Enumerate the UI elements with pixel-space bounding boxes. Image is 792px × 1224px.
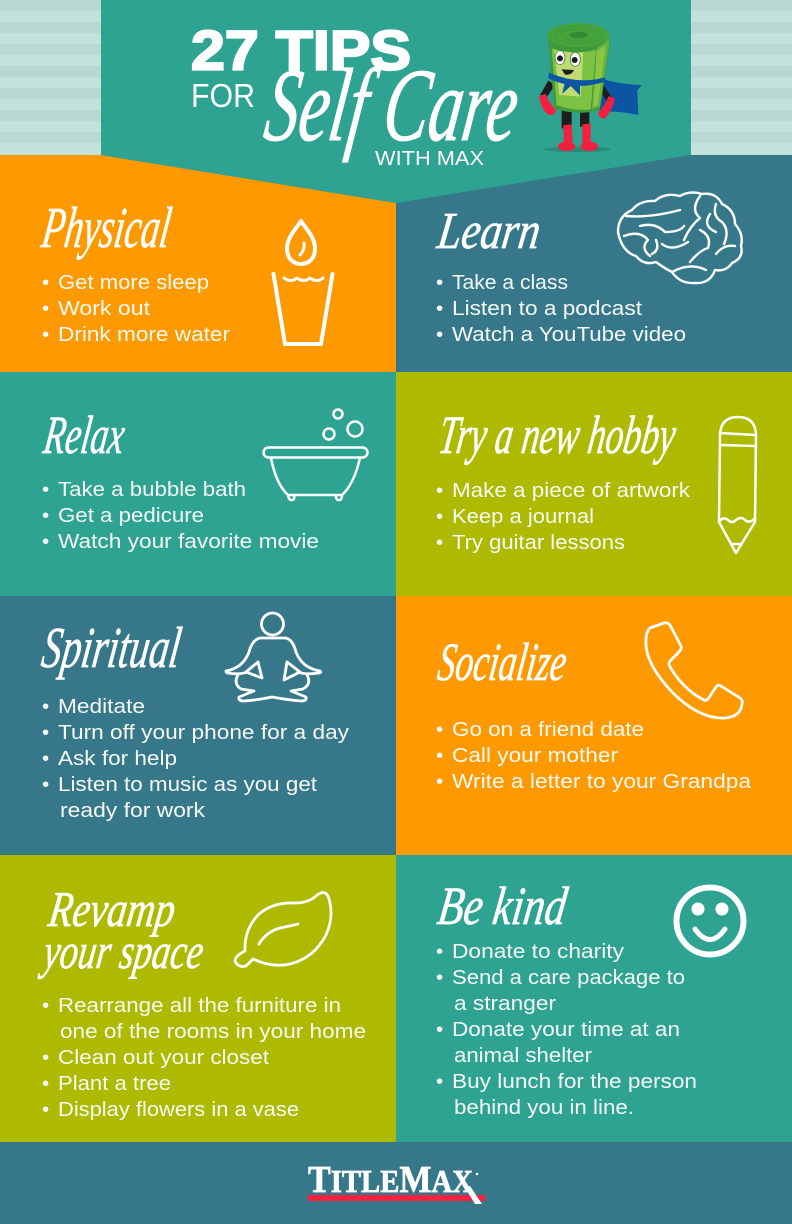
list: physical: Work out bbox=[58, 297, 150, 320]
list: be kind: • bbox=[436, 966, 443, 989]
heading: revamp your space: Revamp bbox=[45, 881, 179, 937]
list: learn: • bbox=[436, 271, 443, 294]
panel: hobby bbox=[396, 372, 792, 596]
list: relax: Watch your favorite movie bbox=[58, 530, 319, 553]
list: relax: • bbox=[42, 530, 49, 553]
list: be kind: Buy lunch for the person bbox=[452, 1070, 697, 1093]
list: hobby: Try guitar lessons bbox=[452, 531, 625, 554]
list: revamp your space: • bbox=[42, 1098, 49, 1121]
list: be kind: Send a care package to bbox=[452, 966, 685, 989]
list: socialize: Write a letter to your Grandpa bbox=[452, 770, 752, 793]
list: spiritual bbox=[42, 695, 350, 822]
icon: brain bbox=[618, 192, 742, 283]
list: spiritual: Ask for help bbox=[58, 747, 177, 770]
list: learn: • bbox=[436, 297, 443, 320]
list: socialize: • bbox=[436, 744, 443, 767]
list: learn: Watch a YouTube video bbox=[452, 323, 686, 346]
panel: socialize bbox=[396, 596, 792, 855]
list: revamp your space: Clean out your closet bbox=[58, 1046, 269, 1069]
list: be kind: Donate your time at an bbox=[452, 1018, 680, 1041]
list: learn bbox=[436, 271, 686, 346]
heading: socialize: Socialize bbox=[434, 632, 571, 692]
list: physical: Get more sleep bbox=[58, 271, 209, 294]
list: spiritual: Turn off your phone for a day bbox=[58, 721, 350, 744]
list: hobby: • bbox=[436, 531, 443, 554]
list: hobby: Keep a journal bbox=[452, 505, 594, 528]
icon: bathtub bbox=[264, 410, 368, 500]
list: be kind: • bbox=[436, 1018, 443, 1041]
icon: meditating figure bbox=[226, 613, 321, 701]
heading: revamp your space: your space bbox=[37, 923, 207, 979]
list: socialize: • bbox=[436, 770, 443, 793]
list: spiritual: ready for work bbox=[60, 799, 206, 822]
list: be kind: • bbox=[436, 1070, 443, 1093]
title bbox=[191, 18, 526, 170]
list: be kind: Donate to charity bbox=[452, 940, 625, 963]
panel: physical bbox=[0, 155, 396, 372]
panel: relax bbox=[0, 372, 396, 596]
list: revamp your space: • bbox=[42, 994, 49, 1017]
panel: be kind bbox=[396, 855, 792, 1142]
title: WITH MAX bbox=[375, 148, 484, 170]
title: Self Care bbox=[259, 47, 526, 163]
icon: pencil bbox=[719, 417, 756, 553]
icon: leaf bbox=[235, 892, 331, 966]
list: hobby: Make a piece of artwork bbox=[452, 479, 691, 502]
list: be kind: animal shelter bbox=[454, 1044, 592, 1067]
list: revamp your space: • bbox=[42, 1046, 49, 1069]
list: socialize: Go on a friend date bbox=[452, 718, 644, 741]
footer logo: TitleMax: TITLEMAX bbox=[308, 1159, 473, 1201]
title: 27 TIPS bbox=[191, 18, 411, 82]
heading: spiritual: Spiritual bbox=[38, 615, 185, 680]
list: relax: • bbox=[42, 478, 49, 501]
list: spiritual: • bbox=[42, 695, 49, 718]
heading: relax: Relax bbox=[40, 405, 129, 465]
list: socialize: Call your mother bbox=[452, 744, 618, 767]
list: relax: Get a pedicure bbox=[58, 504, 204, 527]
header banner bbox=[101, 0, 691, 203]
list: learn: Take a class bbox=[452, 271, 568, 294]
list: hobby: • bbox=[436, 505, 443, 528]
list: relax bbox=[42, 478, 319, 553]
list: spiritual: • bbox=[42, 773, 49, 796]
list: spiritual: Listen to music as you get bbox=[58, 773, 317, 796]
heading: try a new hobby: Try a new hobby bbox=[435, 405, 680, 465]
icon: glass of water bbox=[274, 221, 332, 344]
list: be kind bbox=[436, 940, 697, 1119]
list: spiritual: • bbox=[42, 721, 49, 744]
icon: smiley face bbox=[676, 888, 744, 954]
mascot: Max the money roll bbox=[539, 23, 642, 152]
icon: telephone handset bbox=[646, 623, 742, 718]
heading: physical: Physical bbox=[38, 195, 175, 260]
list: be kind: a stranger bbox=[454, 992, 556, 1015]
list: revamp your space: Display flowers in a vase bbox=[58, 1098, 299, 1121]
list: spiritual: • bbox=[42, 747, 49, 770]
list: socialize bbox=[436, 718, 752, 793]
list: revamp your space: Plant a tree bbox=[58, 1072, 171, 1095]
list: revamp your space bbox=[42, 994, 366, 1121]
list: physical: • bbox=[42, 297, 49, 320]
list: spiritual: Meditate bbox=[58, 695, 145, 718]
list: revamp your space: one of the rooms in your home bbox=[60, 1020, 366, 1043]
panel: spiritual bbox=[0, 596, 396, 855]
list: revamp your space: Rearrange all the furniture in bbox=[58, 994, 341, 1017]
striped side background bbox=[0, 0, 792, 155]
heading: be kind: Be kind bbox=[434, 876, 571, 936]
list: be kind: behind you in line. bbox=[454, 1096, 634, 1119]
list: relax: • bbox=[42, 504, 49, 527]
list: relax: Take a bubble bath bbox=[58, 478, 246, 501]
list: physical: Drink more water bbox=[58, 323, 230, 346]
list: learn: Listen to a podcast bbox=[452, 297, 642, 320]
list: revamp your space: • bbox=[42, 1072, 49, 1095]
list: socialize: • bbox=[436, 718, 443, 741]
list: hobby bbox=[436, 479, 691, 554]
list: learn: • bbox=[436, 323, 443, 346]
list: hobby: • bbox=[436, 479, 443, 502]
title: FOR bbox=[191, 77, 255, 114]
panel: revamp your space bbox=[0, 855, 396, 1142]
list: physical bbox=[42, 271, 230, 346]
list: physical: • bbox=[42, 271, 49, 294]
list: physical: • bbox=[42, 323, 49, 346]
list: be kind: • bbox=[436, 940, 443, 963]
heading: learn: Learn bbox=[434, 202, 544, 260]
heading: revamp your space bbox=[37, 881, 207, 979]
panel: learn bbox=[396, 155, 792, 372]
